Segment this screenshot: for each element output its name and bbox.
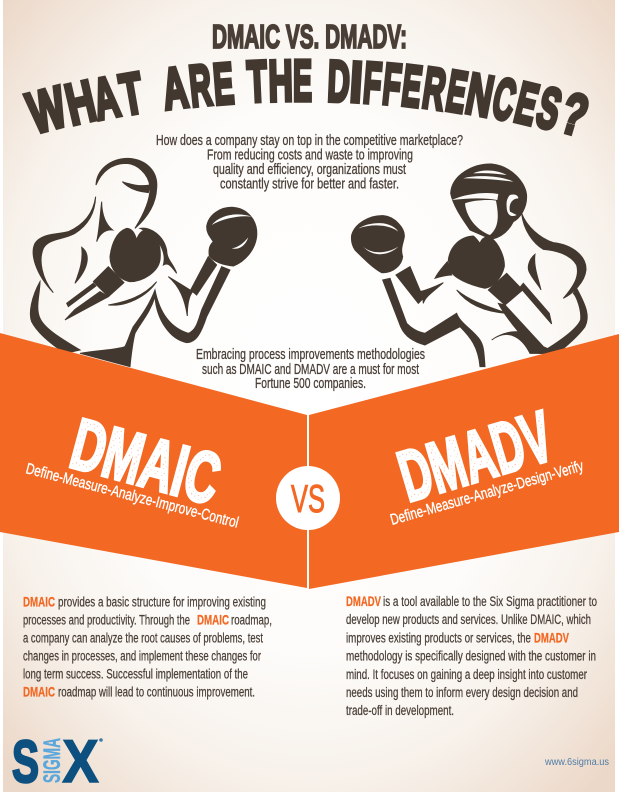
text block: DMAIC description: DMAIC <box>197 612 229 628</box>
intro text: How does a company stay on top in the competitive marketplace? <box>156 133 463 149</box>
callout: process improvements: Embracing process improvements methodologies <box>196 347 425 363</box>
heading: What are the differences: I <box>348 50 365 116</box>
callout: process improvements: such as DMAIC and DMADV are a must for most <box>202 362 419 378</box>
text block: DMAIC description: roadmap will lead to continuous improvement. <box>58 684 255 700</box>
heading: What are the differences: C <box>487 65 522 133</box>
VS badge <box>276 466 340 530</box>
heading: What are the differences: H <box>60 68 102 138</box>
intro text: quality and efficiency, organizations must <box>213 162 406 178</box>
text block: DMAIC description: DMAIC <box>23 594 55 610</box>
DMAIC expansion: Define-Measure-Analyze-Improve-Control <box>24 460 240 532</box>
boxer: right <box>351 164 587 367</box>
heading: What are the differences: F <box>380 50 404 118</box>
heading: What are the differences: E <box>509 69 544 137</box>
website: www.6sigma.us <box>544 756 609 768</box>
intro text: From reducing costs and waste to improving <box>207 148 413 164</box>
panel: DMAIC banner <box>0 333 307 588</box>
heading: What are the differences: A <box>88 65 125 133</box>
text block: DMADV description: improves existing products or services, the <box>346 630 531 646</box>
text block: DMAIC description: DMAIC <box>23 684 55 700</box>
boxer: left <box>30 158 257 367</box>
intro text <box>156 133 463 192</box>
heading: What are the differences: R <box>419 55 450 122</box>
heading: DMAIC vs. DMADV: DMAIC VS. DMADV: <box>212 18 407 55</box>
text block: DMAIC description: changes in processes, and implement these changes for <box>23 648 261 664</box>
heading: What are the differences: S <box>531 74 568 142</box>
heading: What are the differences: N <box>461 62 498 130</box>
heading: What are the differences: T <box>115 61 148 128</box>
panel: DMADV banner <box>309 334 619 589</box>
intro text: constantly strive for better and faster. <box>220 176 399 192</box>
heading: What are the differences: F <box>361 49 384 116</box>
logo: Six Sigma: SIGMA <box>39 738 66 783</box>
heading: What are the differences: D <box>326 48 351 114</box>
heading: What are the differences: R <box>186 52 215 119</box>
DMAIC title: DMAIC <box>63 404 228 520</box>
logo: Six Sigma <box>12 728 103 792</box>
heading: What are the differences: H <box>268 49 293 114</box>
heading: What are the differences: A <box>159 55 191 123</box>
text block: DMADV description: DMADV <box>346 594 381 609</box>
text block: DMADV description: DMADV <box>534 630 569 646</box>
text block: DMADV description: trade-off in development. <box>346 703 454 718</box>
heading: What are the differences <box>21 48 595 149</box>
heading: What are the differences: E <box>399 53 425 120</box>
text block: DMAIC description <box>23 594 272 700</box>
text block: DMAIC description: processes and productivity. Through the <box>23 612 190 628</box>
VS badge: VS <box>291 478 325 521</box>
heading: What are the differences: E <box>211 50 236 117</box>
callout: process improvements <box>196 347 425 392</box>
text block: DMAIC description: roadmap, <box>231 612 272 628</box>
text block: DMAIC description: a company can analyze the root causes of problems, test <box>23 630 263 646</box>
text block: DMAIC description: long term success. Successful implementation of the <box>23 666 248 682</box>
heading: What are the differences: T <box>246 48 269 114</box>
heading: What are the differences: E <box>442 58 472 125</box>
heading: What are the differences: E <box>293 48 312 113</box>
callout: process improvements: Fortune 500 companies. <box>255 376 366 392</box>
heading: What are the differences: W <box>21 74 73 146</box>
heading: What are the differences: ? <box>554 80 595 149</box>
text block: DMAIC description: provides a basic structure for improving existing <box>58 594 266 610</box>
text block: DMADV description <box>346 594 597 718</box>
